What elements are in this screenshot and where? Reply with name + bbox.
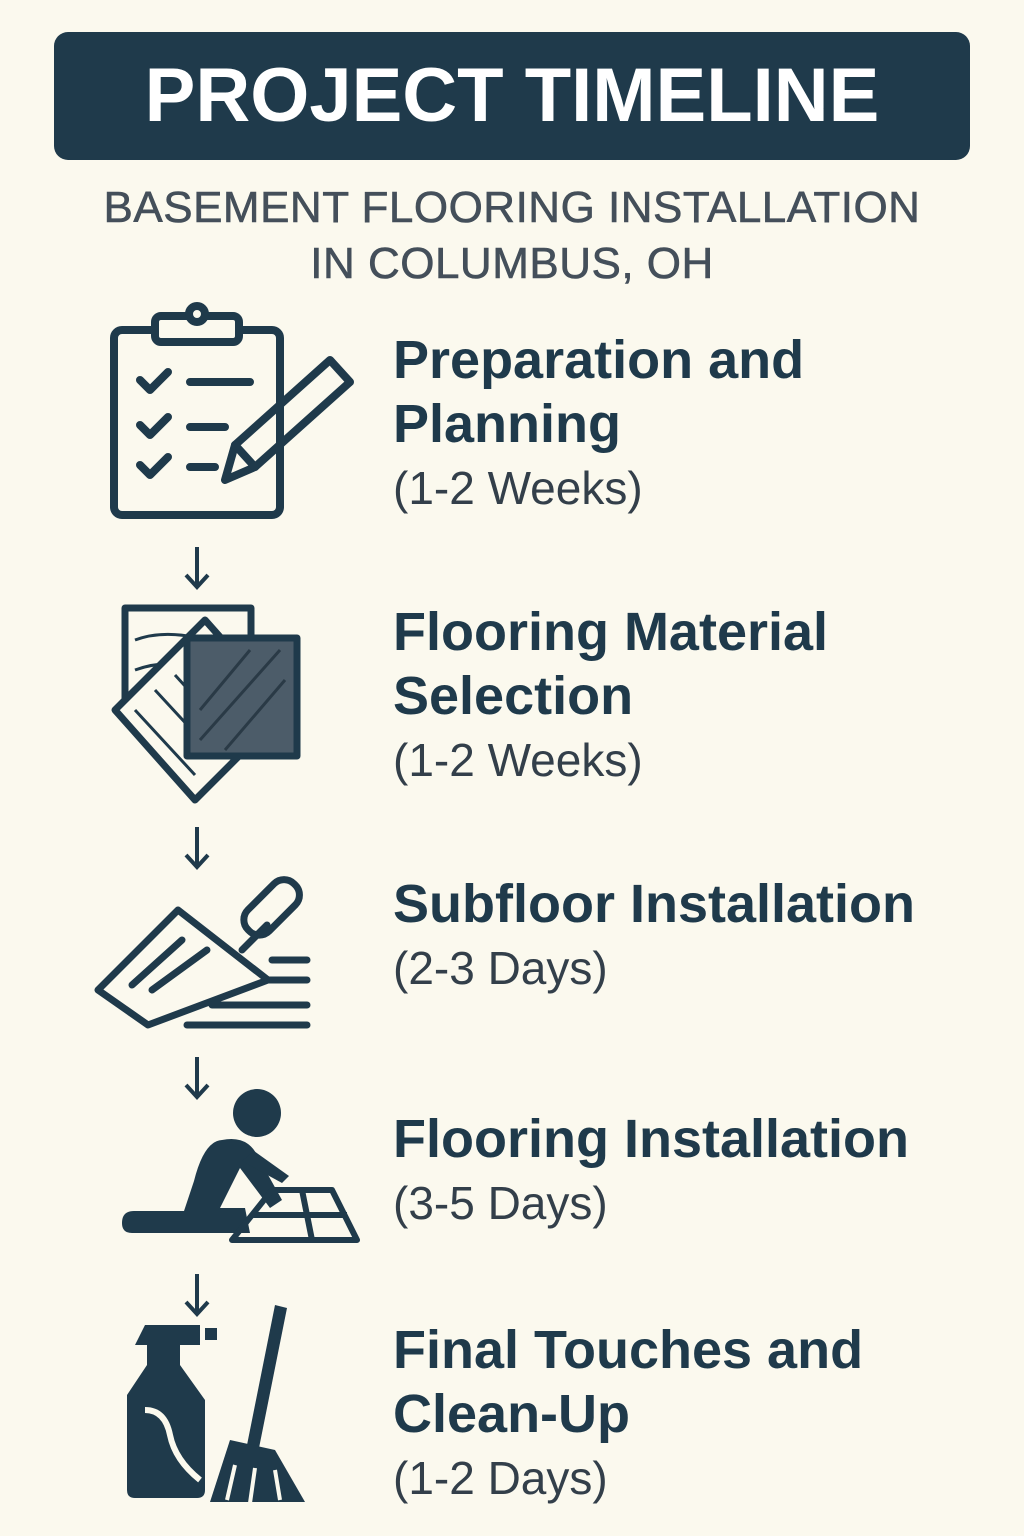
step 2 text: Selection [393, 666, 633, 726]
step 2 text [393, 602, 828, 786]
arrow 4 [184, 1274, 210, 1317]
step 1 text: Planning [393, 394, 621, 454]
step 1 text: (1-2 Weeks) [393, 462, 643, 514]
step 1 text [393, 330, 804, 514]
icon: kneeling worker [122, 1089, 360, 1243]
step 5 text: (1-2 Days) [393, 1452, 608, 1504]
subtitle: IN COLUMBUS, OH [310, 239, 714, 288]
arrow 1 [184, 547, 210, 590]
step 3 text: Subfloor Installation [393, 874, 915, 934]
step 3 text: (2-3 Days) [393, 942, 608, 994]
icon: material samples [112, 604, 300, 804]
step 1 text: Preparation and [393, 330, 804, 390]
step 4 text [393, 1109, 909, 1229]
subtitle: BASEMENT FLOORING INSTALLATION [104, 183, 920, 232]
title: PROJECT TIMELINE [145, 53, 879, 138]
step 5 text [393, 1320, 863, 1504]
step 2 text: (1-2 Weeks) [393, 734, 643, 786]
step 3 text [393, 874, 915, 994]
subtitle [104, 183, 920, 288]
arrow 3 [184, 1057, 210, 1100]
icon: clipboard [110, 302, 354, 519]
step 4 text: Flooring Installation [393, 1109, 909, 1169]
icon: trowel [94, 876, 310, 1028]
step 5 text: Final Touches and [393, 1320, 863, 1380]
step 2 text: Flooring Material [393, 602, 828, 662]
step 4 text: (3-5 Days) [393, 1177, 608, 1229]
arrow 2 [184, 827, 210, 870]
step 5 text: Clean-Up [393, 1384, 630, 1444]
title [54, 32, 970, 160]
icon: spray bottle and broom [127, 1305, 305, 1502]
